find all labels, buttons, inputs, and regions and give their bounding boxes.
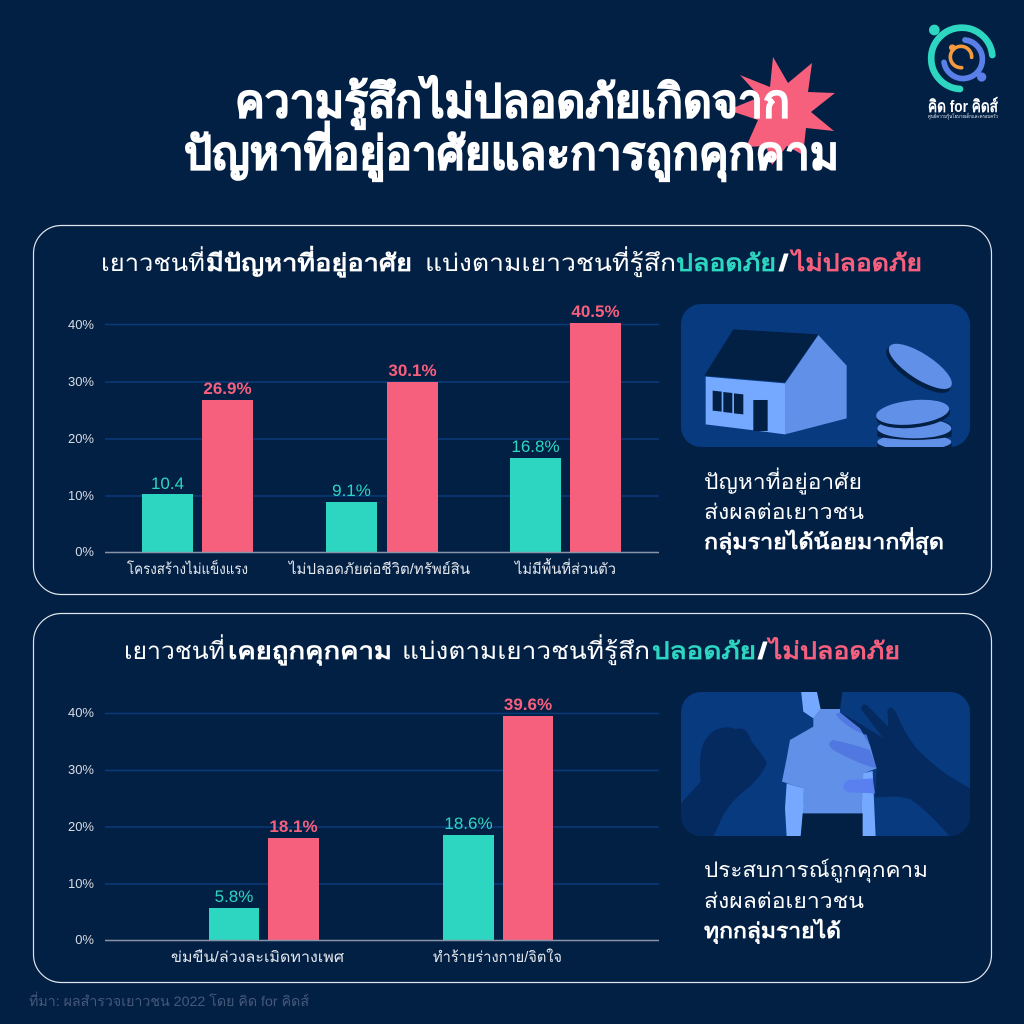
text: housing note: ปัญหาที่อยู่อาศัย (704, 467, 862, 495)
bar chart: housing (68, 302, 659, 578)
bar chart: housing: 30.1% (388, 361, 437, 380)
text: harassment note: ส่งผลต่อเยาวชน (704, 890, 864, 913)
bar chart: harassment: 0% (75, 932, 94, 947)
text: harassment note: ทุกกลุ่มรายได้ (704, 918, 841, 945)
icon: pink starburst (728, 57, 835, 165)
bar chart: housing: 0% (75, 544, 94, 559)
bar chart: housing: 40.5% (571, 302, 620, 321)
heading: harassment chart: เยาวชนที่ (124, 634, 225, 665)
bar chart: housing: 10% (68, 488, 94, 503)
title: ความรู้สึกไม่ปลอดภัยเกิดจาก (235, 75, 790, 130)
title: ปัญหาที่อยู่อาศัยและการถูกคุกคาม (184, 121, 839, 182)
bar chart: harassment (68, 695, 659, 966)
bar chart: housing: 9.1% (332, 481, 371, 500)
bar chart: housing: 20% (68, 431, 94, 446)
bar chart: harassment: 30% (68, 762, 94, 777)
text: housing note (704, 467, 944, 556)
heading: housing chart: เยาวชนที่ (101, 246, 205, 277)
bar chart: housing: 26.9% (203, 379, 252, 398)
heading: housing chart: มีปัญหาที่อยู่อาศัย (206, 245, 412, 278)
panel: harassment (34, 614, 992, 982)
bar chart: harassment: 10% (68, 876, 94, 891)
bar chart: harassment: 18.6% (444, 814, 493, 833)
bar chart: harassment: 39.6% (504, 695, 552, 714)
title (184, 75, 839, 182)
bar chart: harassment: 18.1% (269, 817, 318, 836)
text: harassment note (704, 858, 928, 945)
logo: ศูนย์ความรู้นโยบายเด็กและครอบครัว (928, 112, 998, 120)
heading: housing chart (101, 245, 922, 278)
heading: harassment chart: แบ่งตามเยาวชนที่รู้สึก (402, 634, 650, 666)
source note: ที่มา: ผลสำรวจเยาวชน 2022 โดย คิด for คิดส์ (29, 992, 309, 1009)
bar chart: harassment: ทำร้ายร่างกาย/จิตใจ (433, 948, 562, 966)
logo (928, 25, 998, 120)
illustration: house and coins (681, 304, 970, 452)
heading: housing chart: แบ่งตามเยาวชนที่รู้สึก (425, 246, 676, 278)
bar chart: harassment: ข่มขืน/ล่วงละเมิดทางเพศ (171, 949, 345, 966)
text: harassment note: ประสบการณ์ถูกคุกคาม (704, 858, 928, 883)
heading: harassment chart: ไม่ปลอดภัย (766, 636, 900, 665)
illustration: person threatened (680, 690, 972, 837)
text: housing note: ส่งผลต่อเยาวชน (704, 501, 864, 524)
text: housing note: กลุ่มรายได้น้อยมากที่สุด (704, 526, 944, 556)
panel: housing problems (34, 226, 992, 594)
bar chart: housing: ไม่มีพื้นที่ส่วนตัว (514, 558, 616, 578)
heading: harassment chart: / (757, 638, 769, 665)
bar chart: harassment: 5.8% (215, 887, 253, 906)
bar chart: housing: 40% (68, 317, 94, 332)
bar chart: harassment: 40% (68, 705, 94, 720)
bar chart: housing: 10.4 (151, 474, 184, 493)
bar chart: housing: 16.8% (511, 437, 560, 456)
heading: housing chart: ปลอดภัย (676, 250, 776, 277)
bar chart: harassment: 20% (68, 819, 94, 834)
heading: harassment chart: เคยถูกคุกคาม (228, 638, 392, 667)
heading: harassment chart: ปลอดภัย (652, 638, 756, 665)
heading: harassment chart (124, 634, 900, 667)
logo: คิด for คิดส์ (928, 96, 998, 116)
heading: housing chart: ไม่ปลอดภัย (789, 248, 922, 277)
bar chart: housing: โครงสร้างไม่แข็งแรง (127, 559, 248, 578)
heading: housing chart: / (778, 250, 790, 277)
bar chart: housing: ไม่ปลอดภัยต่อชีวิต/ทรัพย์สิน (288, 560, 470, 578)
bar chart: housing: 30% (68, 374, 94, 389)
